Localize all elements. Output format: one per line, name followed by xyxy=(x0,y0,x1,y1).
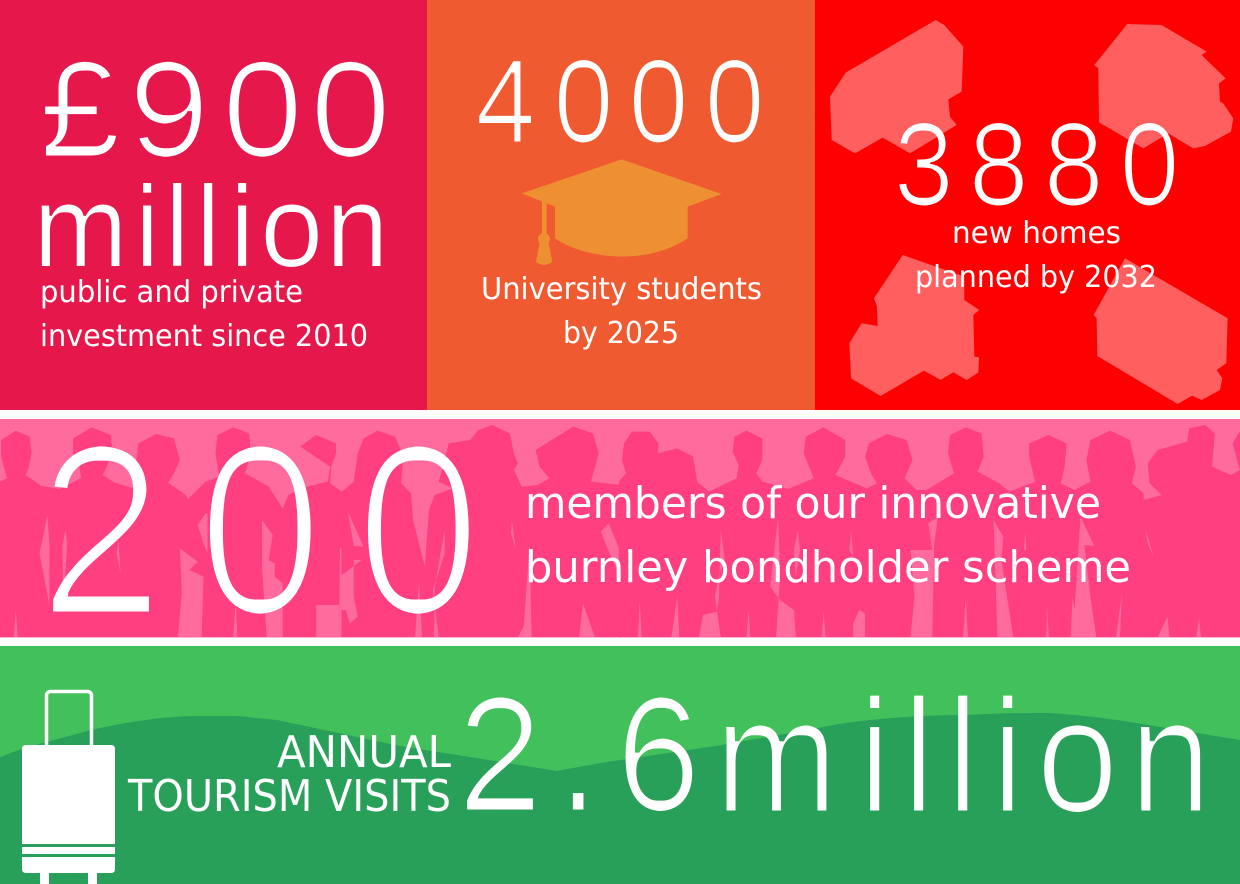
icon: graduation cap xyxy=(522,159,722,265)
tourism figure: million xyxy=(714,666,1212,845)
icon: houses xyxy=(830,20,1233,404)
bondholders figure: 200 xyxy=(38,396,481,665)
panel: homes xyxy=(815,0,1240,410)
tourism figure: 2.6 xyxy=(457,664,701,845)
tourism caption xyxy=(127,727,451,822)
panel: bondholders xyxy=(0,396,1240,665)
students figure: 4000 xyxy=(475,36,765,167)
bondholders caption: burnley bondholder scheme xyxy=(525,542,1131,593)
tourism figure xyxy=(457,664,1212,845)
homes caption: planned by 2032 xyxy=(915,260,1157,295)
bondholders caption xyxy=(525,478,1131,593)
million heading: million xyxy=(33,164,389,291)
tourism caption: TOURISM VISITS xyxy=(127,771,451,822)
homes figure: 3880 xyxy=(894,99,1180,230)
students caption: University students xyxy=(481,272,762,307)
students caption: by 2025 xyxy=(563,316,679,351)
hills xyxy=(0,713,1240,884)
investment caption: public and private xyxy=(40,275,303,310)
crowd silhouette xyxy=(0,425,1240,637)
icon: suitcase xyxy=(22,692,115,884)
bondholders caption: members of our innovative xyxy=(525,478,1101,529)
investment figure: £900 xyxy=(39,33,391,185)
students caption xyxy=(481,272,762,351)
investment caption xyxy=(40,275,368,354)
panel: investment xyxy=(0,0,427,410)
homes caption xyxy=(915,216,1157,295)
panel: students xyxy=(427,0,815,410)
homes caption: new homes xyxy=(952,216,1121,251)
tourism caption: ANNUAL xyxy=(277,727,451,778)
investment caption: investment since 2010 xyxy=(40,319,368,354)
panel: tourism xyxy=(0,646,1240,884)
